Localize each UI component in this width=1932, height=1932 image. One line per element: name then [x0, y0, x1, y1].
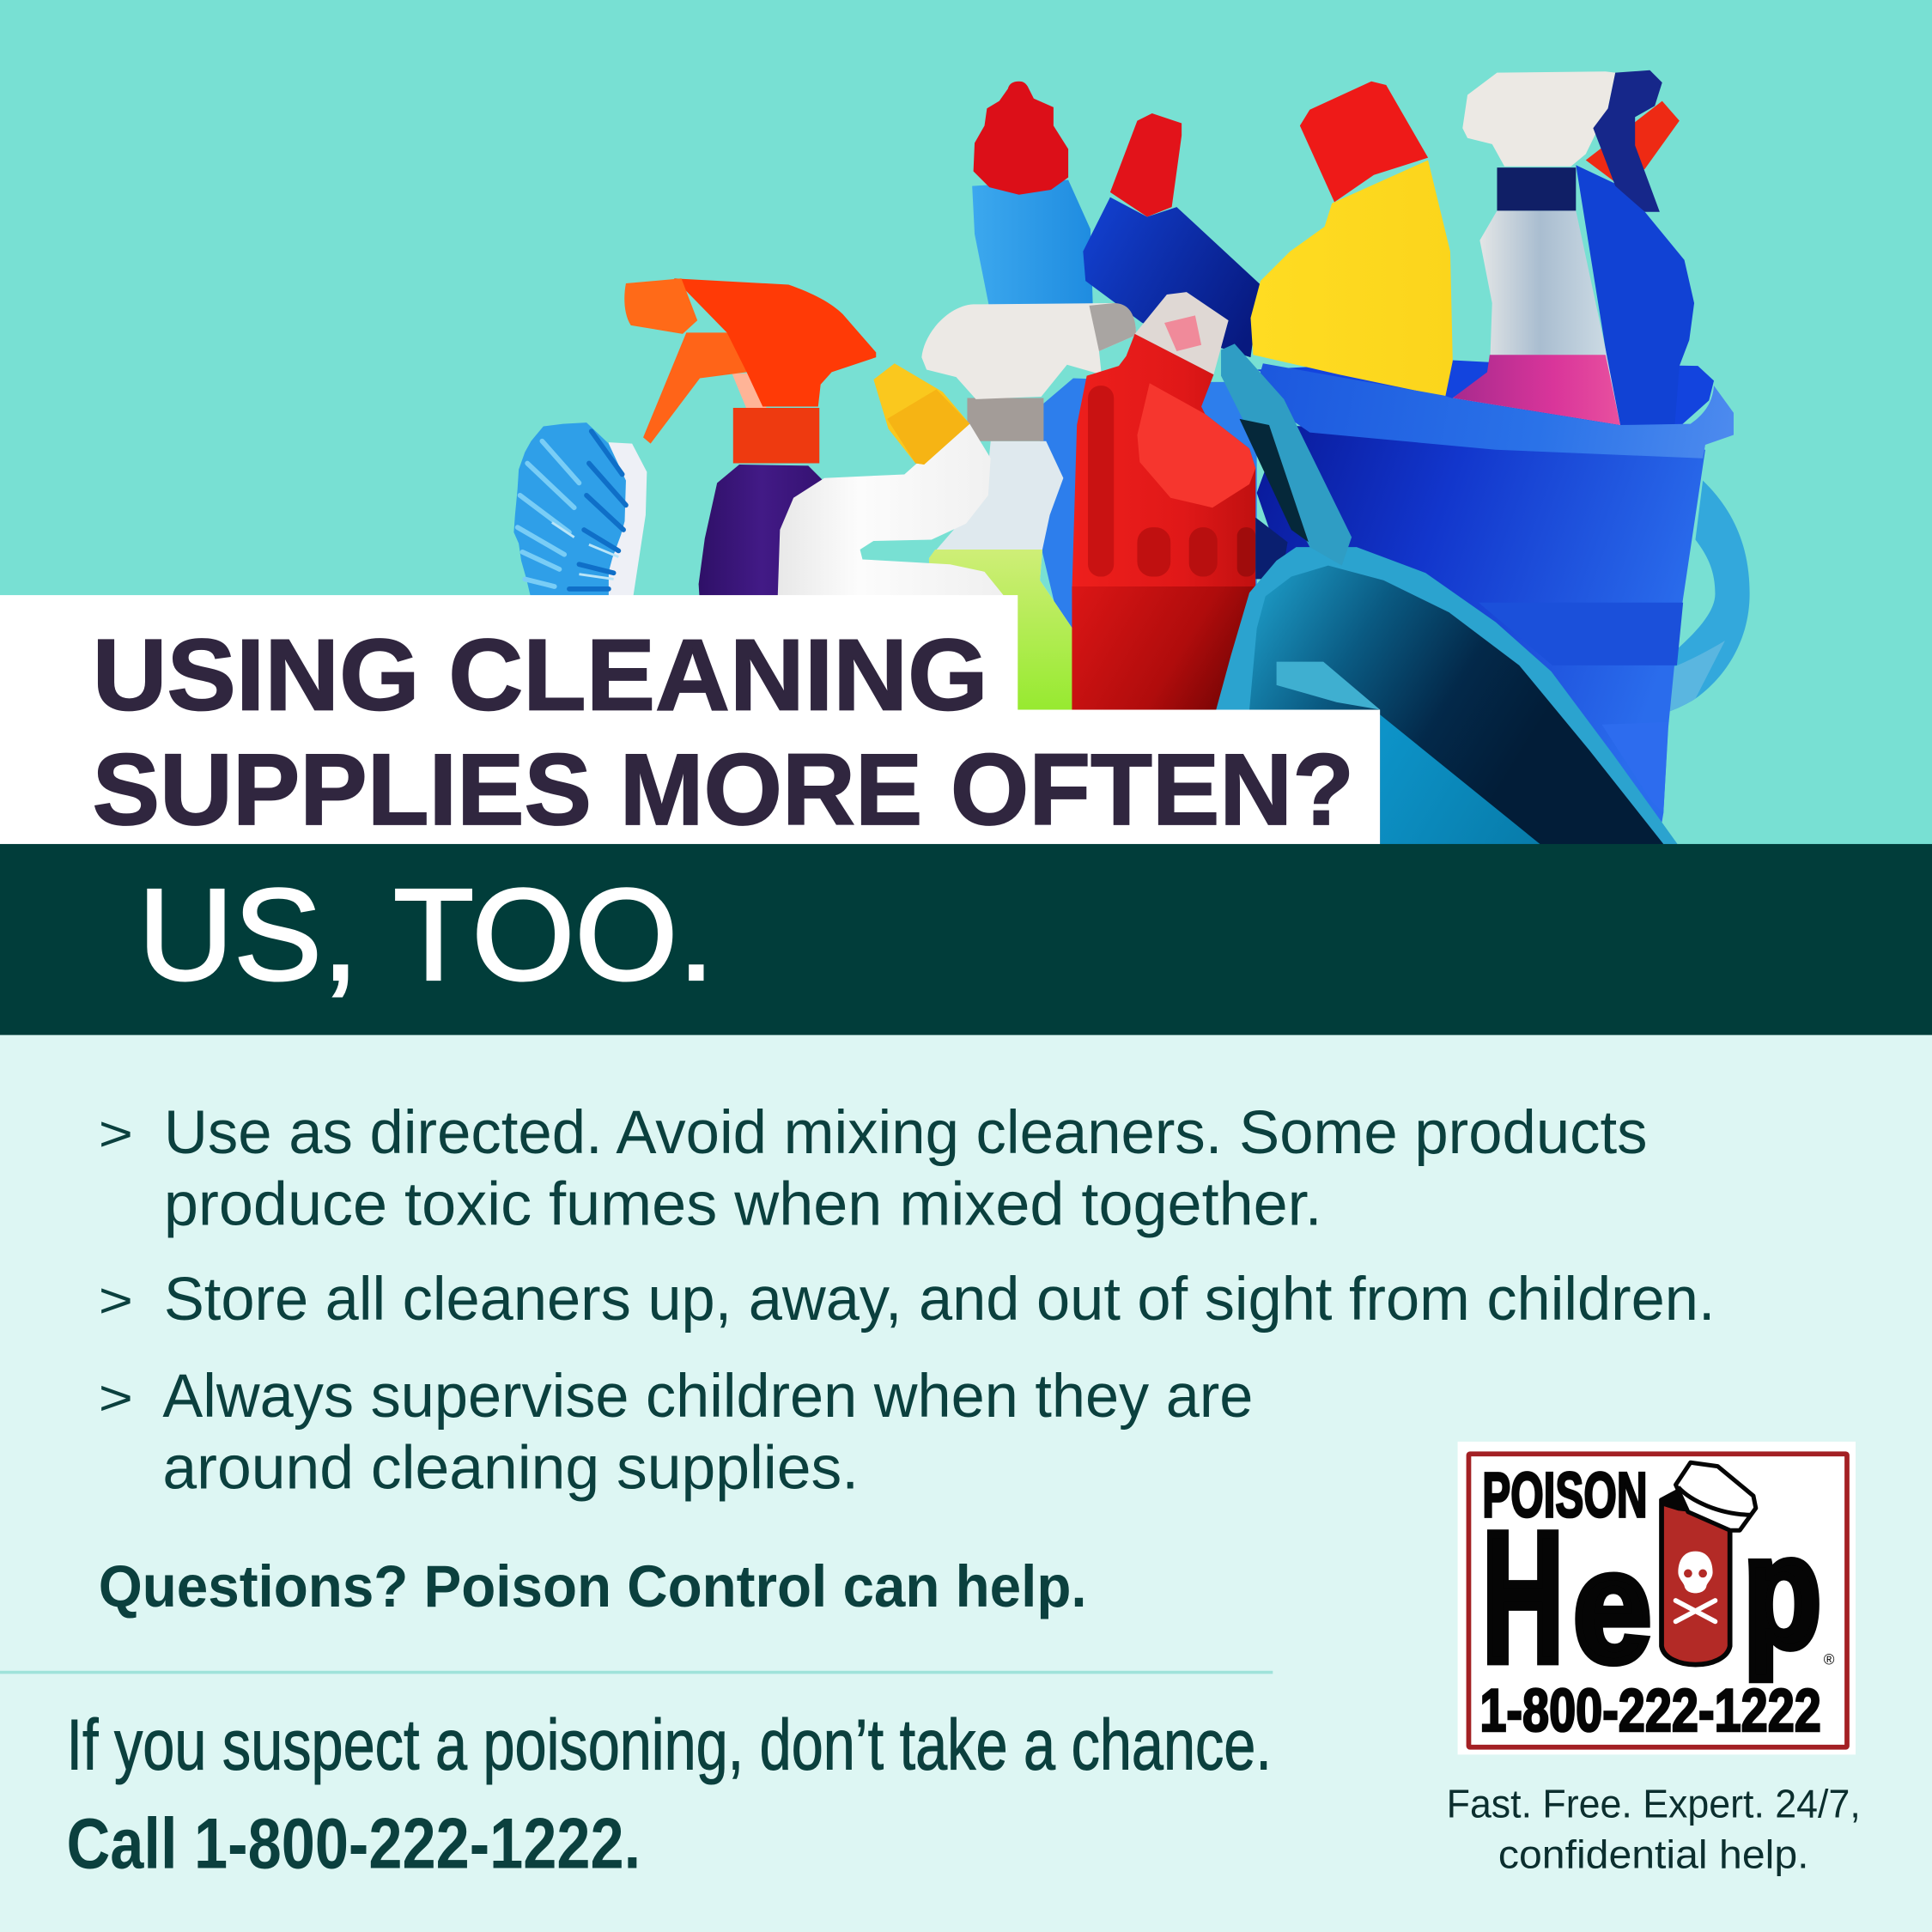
headline [93, 618, 1354, 846]
logo caption: Fast. Free. Expert. 24/7, [1447, 1782, 1861, 1826]
logo word: help [1482, 1493, 1821, 1700]
tip 1: Use as directed. Avoid mixing cleaners. Some products [164, 1098, 1648, 1167]
tips list [99, 1098, 1715, 1502]
scrub brush [513, 422, 647, 604]
clear spray bottle with pink liquid [1453, 70, 1662, 425]
tip 1: produce toxic fumes when mixed together. [164, 1170, 1322, 1238]
bucket handle [1528, 481, 1750, 722]
dustpan [1216, 343, 1682, 850]
logo icon: poison bottle [1660, 1462, 1756, 1665]
call to action: Call 1-800-222-1222. [66, 1803, 641, 1883]
questions line: Questions? Poison Control can help. [99, 1553, 1087, 1619]
dark band [0, 844, 1932, 1035]
tip 1 [99, 1098, 1648, 1238]
logo icon: skull and crossbones [1676, 1552, 1715, 1621]
light blue bottle with red nozzle [972, 82, 1093, 308]
dark blue bottle with red cap [1083, 113, 1261, 357]
tip 3: > [99, 1370, 133, 1425]
bucket back interior [1257, 360, 1714, 431]
subheading: us, too: US, TOO. [138, 862, 714, 1008]
tip 2: Store all cleaners up, away, and out of sight from children. [164, 1265, 1715, 1334]
logo phone number: 1-800-222-1222 [1479, 1676, 1821, 1744]
white toilet cleaner bottle with yellow cap [777, 363, 1011, 604]
logo word: poison: POISON [1482, 1458, 1648, 1530]
tip 1: > [99, 1107, 133, 1162]
tip 3 [99, 1362, 1253, 1502]
tip 2: > [99, 1273, 133, 1328]
tip 3: Always supervise children when they are [162, 1362, 1253, 1431]
logo word: help: H [1482, 1493, 1564, 1700]
teal hero background [0, 0, 1932, 845]
bucket body [1040, 363, 1734, 850]
call to action [66, 1705, 1272, 1883]
orange spray bottle [624, 278, 876, 604]
clear spray bottle with green liquid [921, 303, 1136, 714]
white headline box [0, 595, 1380, 845]
logo caption [1447, 1782, 1861, 1876]
tip 3: around cleaning supplies. [162, 1433, 859, 1502]
call to action: If you suspect a poisoning, don’t take a chance. [66, 1705, 1272, 1785]
registered mark: ® [1824, 1651, 1835, 1668]
poison help logo [1458, 1442, 1856, 1754]
headline: USING CLEANING [93, 618, 988, 732]
yellow bottle with red cap [1250, 82, 1453, 397]
red bottle with clear cap [1072, 292, 1255, 714]
logo caption: confidential help. [1498, 1832, 1809, 1876]
headline: SUPPLIES MORE OFTEN? [93, 732, 1354, 846]
logo word: help: e [1573, 1518, 1651, 1694]
illustration: bucket of cleaning supplies [513, 70, 1750, 850]
blue bottle behind clear spray [1576, 101, 1694, 428]
logo word: help: p [1743, 1504, 1821, 1680]
